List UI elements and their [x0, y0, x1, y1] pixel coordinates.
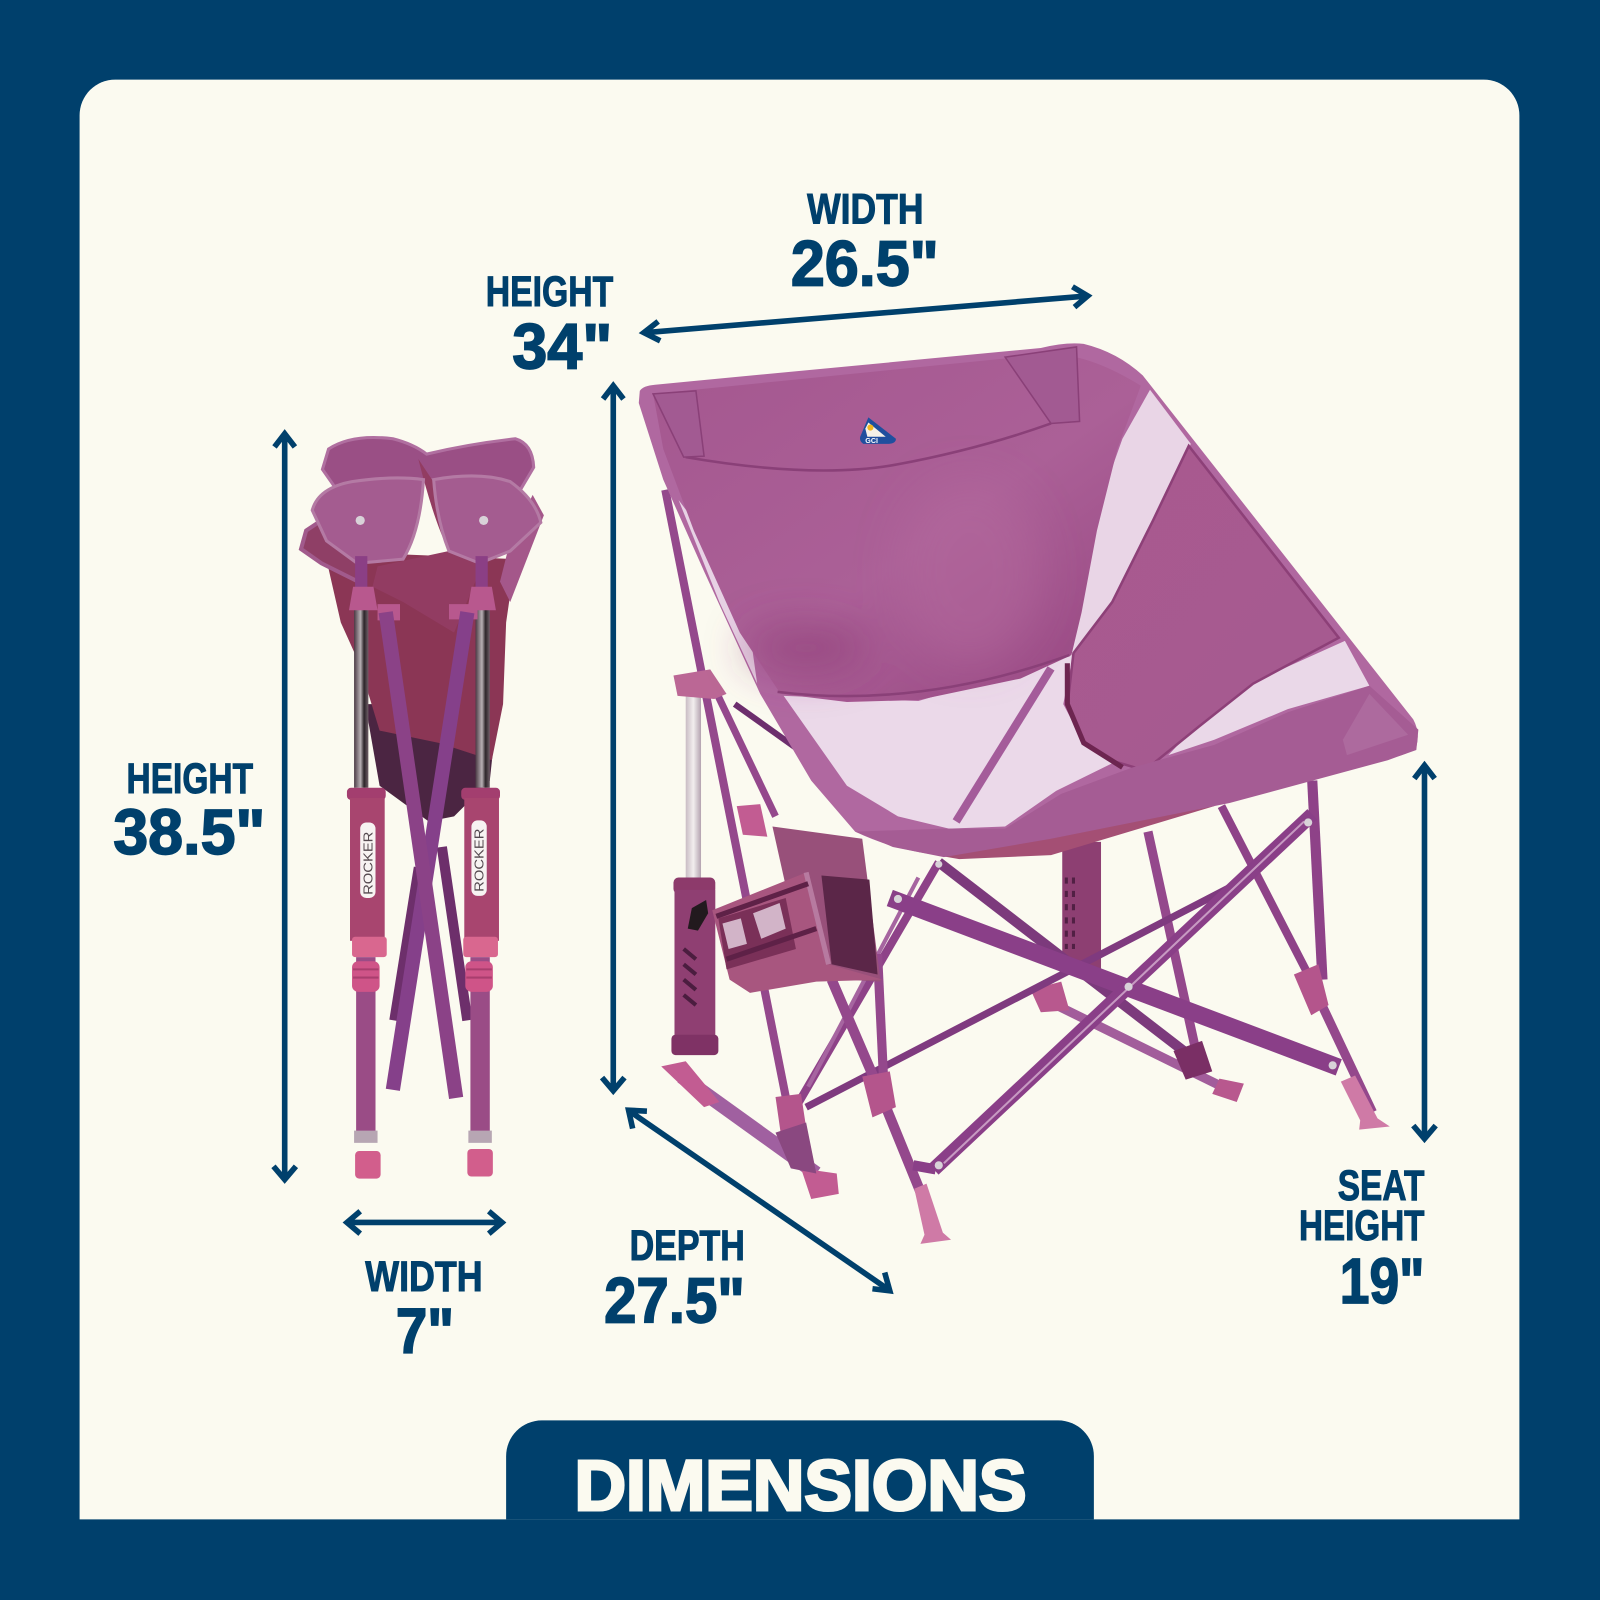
mesh: lower right: [1168, 641, 1369, 755]
folded chair: left rocker cylinder: [347, 788, 387, 1179]
title: DIMENSIONS: DIMENSIONS: [574, 1446, 1027, 1526]
label: height 34: [486, 268, 613, 382]
chair frame: back hinge bracket: [1173, 1041, 1212, 1080]
folded chair: lower diagonal bars: [386, 612, 467, 1098]
folded chair: dark mesh: [365, 704, 498, 821]
folded chair: rear fabric lobes: [322, 438, 534, 490]
arrow: seat height: [1413, 765, 1436, 1139]
logo wordmark: GCI: [865, 437, 878, 445]
folded chair: rivets: [356, 516, 488, 525]
chair: left rocker cylinder: [671, 878, 718, 1055]
folded chair photo: [301, 438, 544, 1179]
fabric: wrinkle highlights: [745, 480, 1041, 672]
unfolded rocking chair photo: [639, 343, 1418, 1244]
fabric: front lip: [855, 686, 1418, 857]
label: height 38.5: 38.5": [113, 796, 265, 868]
folded chair: chrome posts: [354, 602, 490, 788]
title tab: [506, 1420, 1094, 1526]
seat strut seen through mesh: [956, 668, 1051, 821]
chair frame: front foot: [914, 1184, 951, 1244]
chair frame: left rocker rail: [661, 1061, 839, 1199]
folded chair: maroon interior fabric: [324, 551, 515, 760]
arrow: folded width: [347, 1211, 502, 1234]
folded chair: centre fold: [372, 459, 480, 633]
mesh: upper right: [1073, 390, 1191, 653]
arrow: chair width: [644, 287, 1088, 341]
fabric: seam stitching: [686, 423, 1069, 696]
folded chair: upper post tubes: [361, 556, 482, 602]
arrow: folded height: [273, 434, 296, 1180]
label: depth 27.5: DEPTH: [630, 1222, 745, 1270]
label: width 7: WIDTH: [365, 1253, 483, 1301]
chair: armrest cap: [673, 669, 727, 699]
folded chair: right rocker cylinder: [461, 788, 500, 1177]
label: ROCKER right: ROCKER: [472, 829, 487, 892]
chair frame: right rear foot: [1341, 1076, 1390, 1130]
label: height 34: HEIGHT: [486, 268, 613, 316]
folded chair: pink pivots: [349, 587, 496, 620]
chair: lower pivot: [737, 804, 767, 837]
fabric: right panel: [1067, 446, 1339, 770]
label: width 7: [365, 1253, 483, 1367]
label: height 38.5: [113, 755, 265, 868]
label: height 34: 34": [512, 310, 612, 382]
label: depth 27.5: 27.5": [604, 1264, 745, 1336]
folded chair: left wing: [301, 520, 367, 584]
label: ROCKER left: ROCKER: [360, 832, 375, 895]
chair frame: bolts: [894, 818, 1337, 1169]
fabric: corner reinforcements: [653, 347, 1080, 457]
label: seat height 19: 19": [1340, 1245, 1424, 1317]
folded chair: front left pocket: [312, 478, 423, 563]
label: seat height 19: HEIGHT: [1299, 1202, 1424, 1250]
fabric: back panel: [653, 354, 1141, 702]
fabric: right corner reinforcement: [1343, 694, 1408, 755]
mesh: left sliver: [679, 500, 757, 684]
logo badge: [860, 417, 896, 445]
folded chair: right wing: [500, 495, 544, 602]
chair: seat sling: [639, 343, 1418, 859]
label: seat height 19: [1299, 1162, 1424, 1317]
label: width 26.5: WIDTH: [807, 185, 923, 233]
chair frame: joints: [776, 964, 1329, 1133]
chair frame: rails and cross bars: [665, 490, 1372, 1192]
chair frame: right rocker foot: [1031, 982, 1244, 1102]
label: width 7: 7": [396, 1295, 454, 1367]
label: width 26.5: 26.5": [791, 228, 939, 300]
fabric: pocket dark edge: [1067, 663, 1122, 767]
label: seat height 19: SEAT: [1338, 1162, 1424, 1210]
mesh: bottom: [784, 638, 1112, 829]
seat outline fabric: [639, 343, 1418, 855]
arrow: chair depth: [629, 1110, 890, 1291]
chair frame: rear parts behind the seat: [939, 781, 1322, 1094]
label: depth 27.5: [604, 1222, 745, 1336]
seat underside: [918, 786, 1235, 859]
label: height 38.5: HEIGHT: [127, 755, 253, 803]
arrow: chair height: [602, 386, 624, 1091]
label: width 26.5: [791, 185, 939, 300]
folded chair: front right pocket: [434, 476, 541, 563]
chair: cup holder pocket: [688, 827, 883, 993]
chair: chrome armrest tube: [686, 696, 701, 880]
